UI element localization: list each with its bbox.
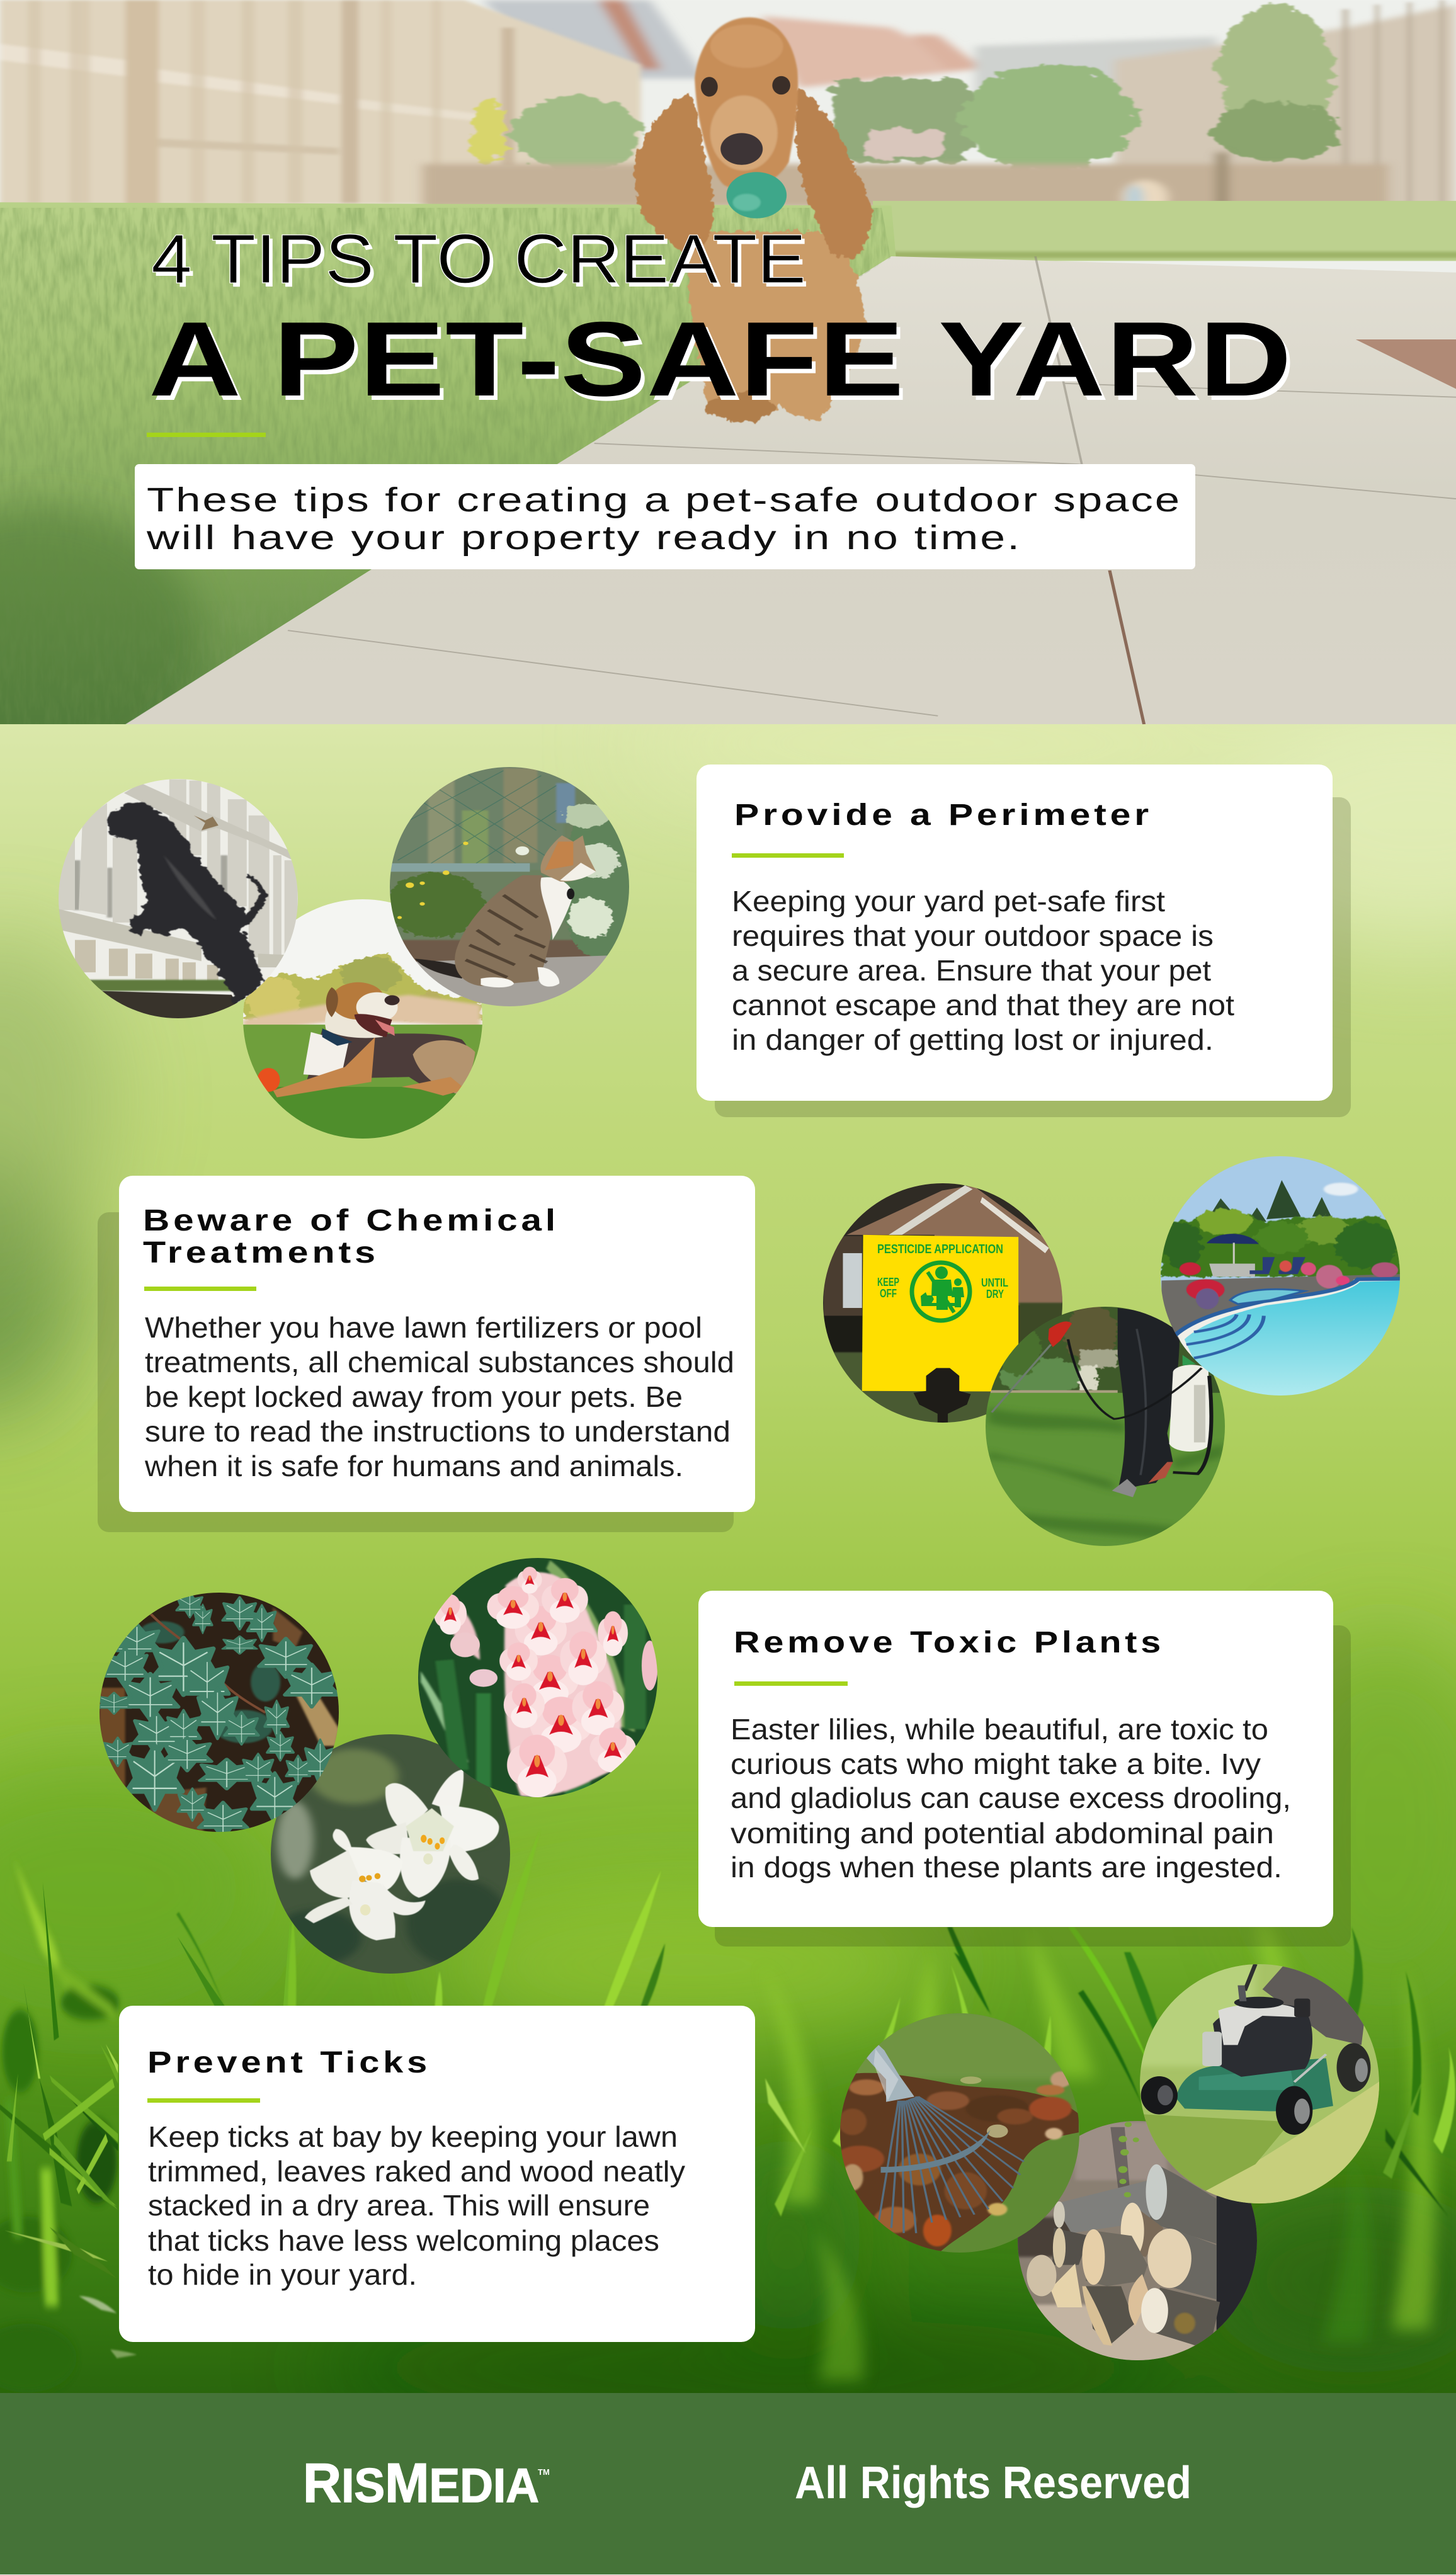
subtitle box: will have your property ready in no time. bbox=[146, 519, 1021, 557]
footer bar bbox=[0, 2393, 1456, 2574]
panel: prevent ticks: that ticks have less welcoming places bbox=[148, 2224, 659, 2257]
panel: beware of chemical treatments: Treatments bbox=[143, 1236, 379, 1270]
title line 2: A PET-SAFE YARD bbox=[152, 304, 1296, 423]
sign text: OFF bbox=[880, 1287, 897, 1300]
panel: beware of chemical treatments: when it is safe for humans and animals. bbox=[144, 1450, 683, 1482]
panel: remove toxic plants: Easter lilies, while beautiful, are toxic to bbox=[731, 1713, 1268, 1746]
sign text: KEEP bbox=[877, 1276, 899, 1288]
title line 2: A PET-SAFE YARD bbox=[149, 300, 1292, 418]
panel: remove toxic plants: vomiting and potential abdominal pain bbox=[731, 1817, 1274, 1850]
photo: stacked firewood bbox=[1011, 2117, 1263, 2363]
panel: provide a perimeter: a secure area. Ensure that your pet bbox=[732, 954, 1211, 987]
panel: provide a perimeter bbox=[697, 765, 1351, 1117]
panel: prevent ticks: Prevent Ticks bbox=[147, 2046, 431, 2079]
panel: provide a perimeter: in danger of getting lost or injured. bbox=[732, 1023, 1214, 1056]
panel: provide a perimeter: Keeping your yard pet-safe first bbox=[732, 885, 1165, 918]
subtitle box bbox=[135, 464, 1195, 569]
photo: ivy on tree bark bbox=[96, 1591, 347, 1838]
photo: green lawn mower bbox=[1135, 1960, 1386, 2207]
panel: beware of chemical treatments: treatments, all chemical substances should bbox=[145, 1346, 734, 1378]
sign text: DRY bbox=[986, 1288, 1004, 1300]
sign text bbox=[877, 1242, 1008, 1300]
photo: pesticide application sign bbox=[812, 1178, 1072, 1428]
panel: provide a perimeter: cannot escape and that they are not bbox=[732, 989, 1234, 1021]
subtitle box: These tips for creating a pet-safe outdoor space bbox=[147, 481, 1181, 519]
icon: keep off circle bbox=[912, 1263, 970, 1321]
mid background: blurred grass bbox=[0, 686, 1456, 2418]
panel: prevent ticks: Keep ticks at bay by keeping your lawn bbox=[148, 2120, 678, 2153]
panel: remove toxic plants: and gladiolus can cause excess drooling, bbox=[731, 1782, 1291, 1814]
sign text: UNTIL bbox=[981, 1276, 1008, 1289]
photo: rake in autumn leaves bbox=[835, 2011, 1082, 2257]
photo: pink gladiolus bbox=[413, 1555, 664, 1801]
logo: RISMedia: TM bbox=[538, 2467, 550, 2477]
title line 1: 4 TIPS TO CREATE bbox=[154, 224, 809, 302]
footer text: All Rights Reserved bbox=[795, 2458, 1192, 2508]
panel: remove toxic plants bbox=[698, 1591, 1351, 1947]
panel: provide a perimeter: Provide a Perimeter bbox=[734, 799, 1152, 832]
photo: person spraying lawn bbox=[981, 1303, 1232, 1549]
panel: beware of chemical treatments bbox=[98, 1176, 755, 1532]
dog with ball bbox=[634, 18, 872, 422]
hero background scene bbox=[0, 0, 1456, 724]
panel: prevent ticks: to hide in your yard. bbox=[148, 2258, 417, 2291]
title rule bbox=[147, 433, 266, 437]
panel: remove toxic plants: in dogs when these plants are ingested. bbox=[731, 1851, 1282, 1884]
photo: backyard swimming pool bbox=[1156, 1151, 1408, 1402]
panel: prevent ticks bbox=[119, 2006, 755, 2342]
panel: beware of chemical treatments: sure to read the instructions to understand bbox=[145, 1415, 731, 1448]
grass texture bbox=[0, 208, 890, 724]
logo: RISMedia: RISMEDIA bbox=[303, 2452, 539, 2514]
hero photo: dog running on yard path bbox=[0, 0, 1456, 781]
photo: dog lying on grass bbox=[239, 897, 488, 1142]
left foreground grass blades bbox=[0, 1858, 292, 2392]
panel: remove toxic plants: curious cats who might take a bite. Ivy bbox=[731, 1748, 1261, 1780]
title line 1: 4 TIPS TO CREATE bbox=[151, 220, 806, 298]
panel: beware of chemical treatments: Whether you have lawn fertilizers or pool bbox=[145, 1311, 702, 1344]
panel: remove toxic plants: Remove Toxic Plants bbox=[734, 1626, 1164, 1659]
photo: easter lilies bbox=[266, 1729, 517, 1979]
photo: tabby cat in garden bbox=[383, 763, 643, 1009]
sign text: PESTICIDE APPLICATION bbox=[877, 1242, 1003, 1256]
panel: beware of chemical treatments: be kept locked away from your pets. Be bbox=[145, 1380, 683, 1413]
panel: beware of chemical treatments: Beware of Chemical bbox=[143, 1204, 559, 1237]
photo: black dog at white fence bbox=[50, 776, 307, 1023]
panel: provide a perimeter: requires that your outdoor space is bbox=[732, 919, 1214, 952]
panel: prevent ticks: trimmed, leaves raked and wood neatly bbox=[148, 2155, 685, 2188]
panel: prevent ticks: stacked in a dry area. This will ensure bbox=[148, 2189, 650, 2222]
